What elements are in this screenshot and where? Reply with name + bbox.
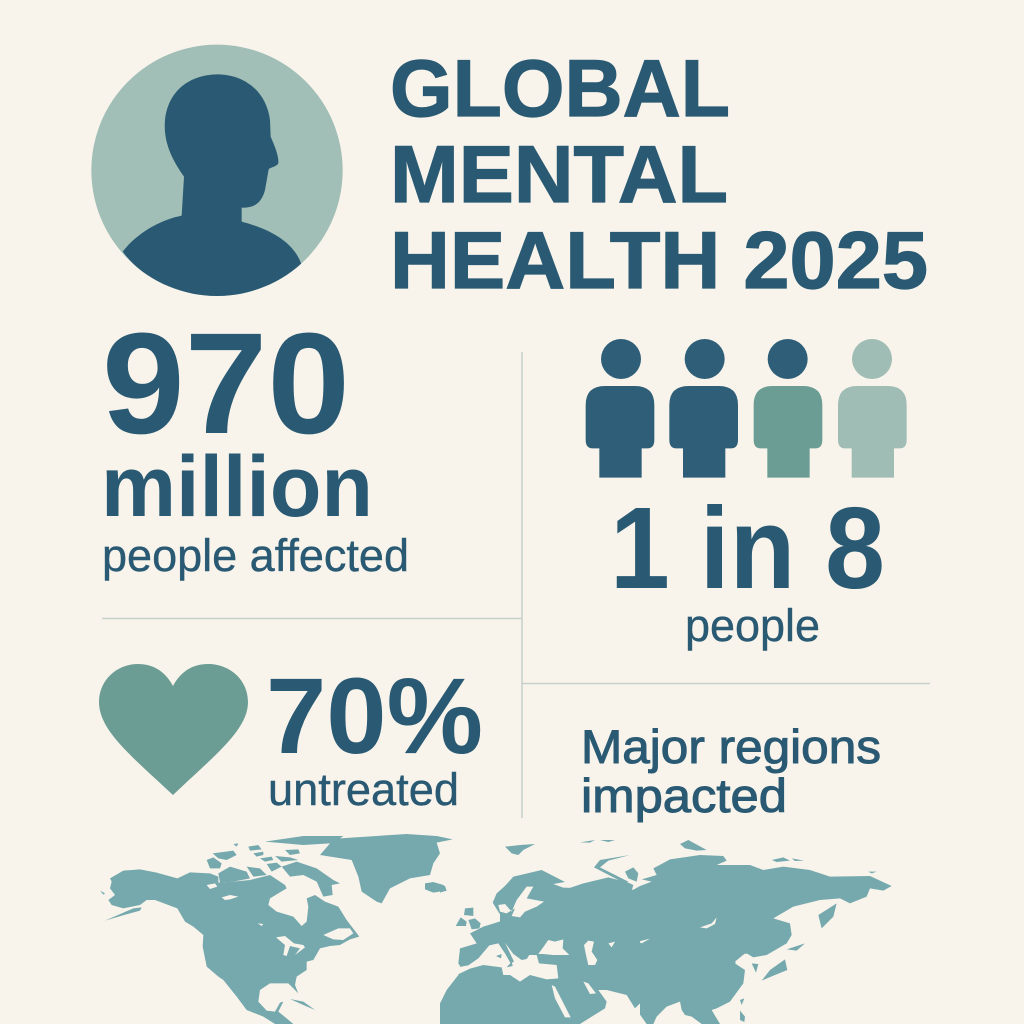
- stat: 1 in 8 people: people: [685, 600, 820, 651]
- heading: major regions impacted: [581, 720, 881, 822]
- stat: 970 million people affected: people affected: [102, 530, 409, 581]
- stat: 70% untreated: 70%: [266, 655, 483, 776]
- stat: 70% untreated: untreated: [268, 764, 459, 815]
- stat: 970 million people affected: [101, 303, 409, 581]
- map: Americas and Atlantic: [100, 834, 453, 1024]
- icon: person profile in circle: [91, 45, 343, 297]
- map: Asia: [500, 840, 892, 1024]
- title: MENTAL: [390, 130, 728, 220]
- icon row: four people: [586, 339, 907, 478]
- icon: heart: [99, 664, 248, 795]
- icon: person 4: [838, 339, 907, 478]
- title: GLOBAL: [390, 44, 730, 134]
- map: Europe, Africa and Middle East: [440, 880, 640, 1024]
- world map: [100, 834, 892, 1024]
- title: HEALTH 2025: [390, 216, 928, 306]
- stat: 1 in 8 people: 1 in 8: [610, 483, 885, 613]
- stat: 970 million people affected: 970: [102, 303, 350, 464]
- heading: major regions impacted: impacted: [581, 769, 787, 822]
- icon: person 3: [754, 339, 822, 478]
- heading: major regions impacted: Major regions: [581, 720, 881, 773]
- stat: 970 million people affected: million: [101, 439, 373, 535]
- icon: person 2: [669, 339, 738, 478]
- icon: person 1: [586, 339, 654, 478]
- title: [390, 44, 928, 306]
